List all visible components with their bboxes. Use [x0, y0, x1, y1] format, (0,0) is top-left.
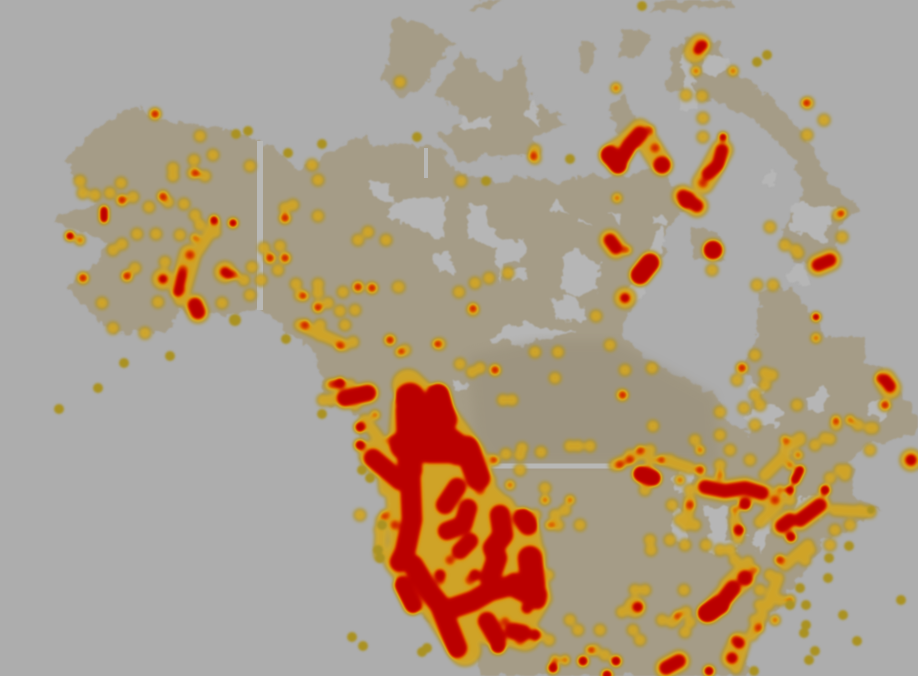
yellow halo: northern and eastern clusters: [163, 45, 911, 668]
red hot clusters: Alaska and the north: [70, 45, 830, 317]
darker prairie region: [468, 340, 720, 465]
yellow single-report dots: [80, 82, 885, 655]
red hot clusters: west: [340, 383, 537, 648]
Alaska-Canada border: [257, 141, 263, 310]
territory border: [424, 148, 428, 178]
land: Victoria Island: [437, 53, 563, 160]
US-Canada border: [490, 464, 615, 468]
land: Southampton Island: [692, 227, 726, 260]
red hot clusters: eastern cities: [553, 380, 911, 675]
border lines: [260, 141, 615, 466]
land: mainland Alaska, Canada and United States: [53, 107, 918, 676]
yellow halo: western states and hot clusters: [375, 385, 530, 650]
land: Baffin Island: [666, 37, 860, 262]
yellow fill: western states: [385, 400, 552, 645]
land: Banks Island: [383, 20, 457, 97]
dots: northern coast: [231, 1, 772, 186]
dots: Pacific coast: [54, 314, 432, 657]
dots: Atlantic coast: [749, 506, 906, 676]
yellow chains: Great Lakes and Atlantic seaboard: [180, 225, 866, 668]
land: northern islands: [470, 0, 731, 133]
snow and ice patches: [368, 48, 890, 555]
